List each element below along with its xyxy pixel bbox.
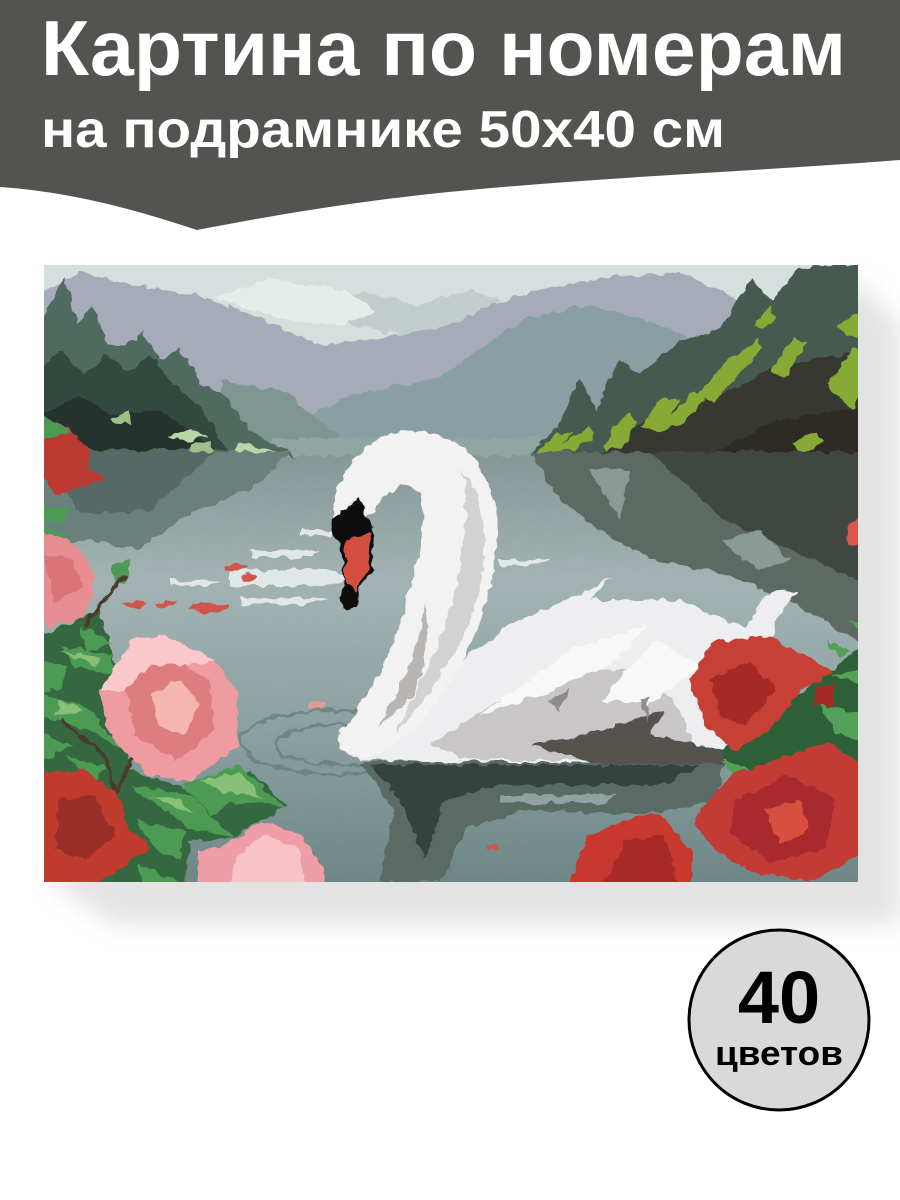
- right reflection: [530, 452, 870, 650]
- swan: [330, 431, 797, 764]
- number of colours: 40: [738, 956, 820, 1039]
- swan beak: [330, 498, 376, 608]
- swan reflection: [360, 762, 725, 882]
- canvas shadow: [50, 280, 900, 925]
- left reflection: [44, 450, 291, 550]
- ripples: [238, 706, 392, 778]
- water highlights: [170, 530, 550, 604]
- header banner: [0, 0, 900, 230]
- colours label: цветов: [715, 1035, 843, 1073]
- lake: [30, 456, 870, 896]
- left pink rose top: [44, 532, 96, 629]
- right edge bud: [846, 518, 858, 546]
- left rose bud: [40, 428, 106, 495]
- left foliage mass: [30, 610, 285, 890]
- bottom red rose: [568, 812, 690, 890]
- sky: [44, 265, 853, 346]
- right forest: [528, 262, 870, 458]
- right red rose upper: [690, 637, 834, 750]
- large pink rose: [100, 635, 238, 782]
- bottom pink rose: [198, 822, 324, 882]
- distant mountains: [44, 270, 737, 458]
- bottom-left red rose: [44, 768, 151, 882]
- left leaves: [35, 412, 284, 885]
- swan body: [342, 578, 797, 762]
- left forest: [30, 278, 300, 458]
- subtitle: на подрамнике 50х40 см: [41, 101, 725, 159]
- floating petals: [124, 563, 500, 852]
- colour count badge: [689, 930, 869, 1110]
- swan neck: [333, 431, 497, 758]
- title: Картина по номерам: [41, 4, 846, 92]
- right red rose lower: [692, 742, 870, 880]
- bright green foliage: [533, 305, 870, 456]
- painting: swan and roses: [30, 255, 870, 896]
- right foliage mass: [720, 649, 858, 770]
